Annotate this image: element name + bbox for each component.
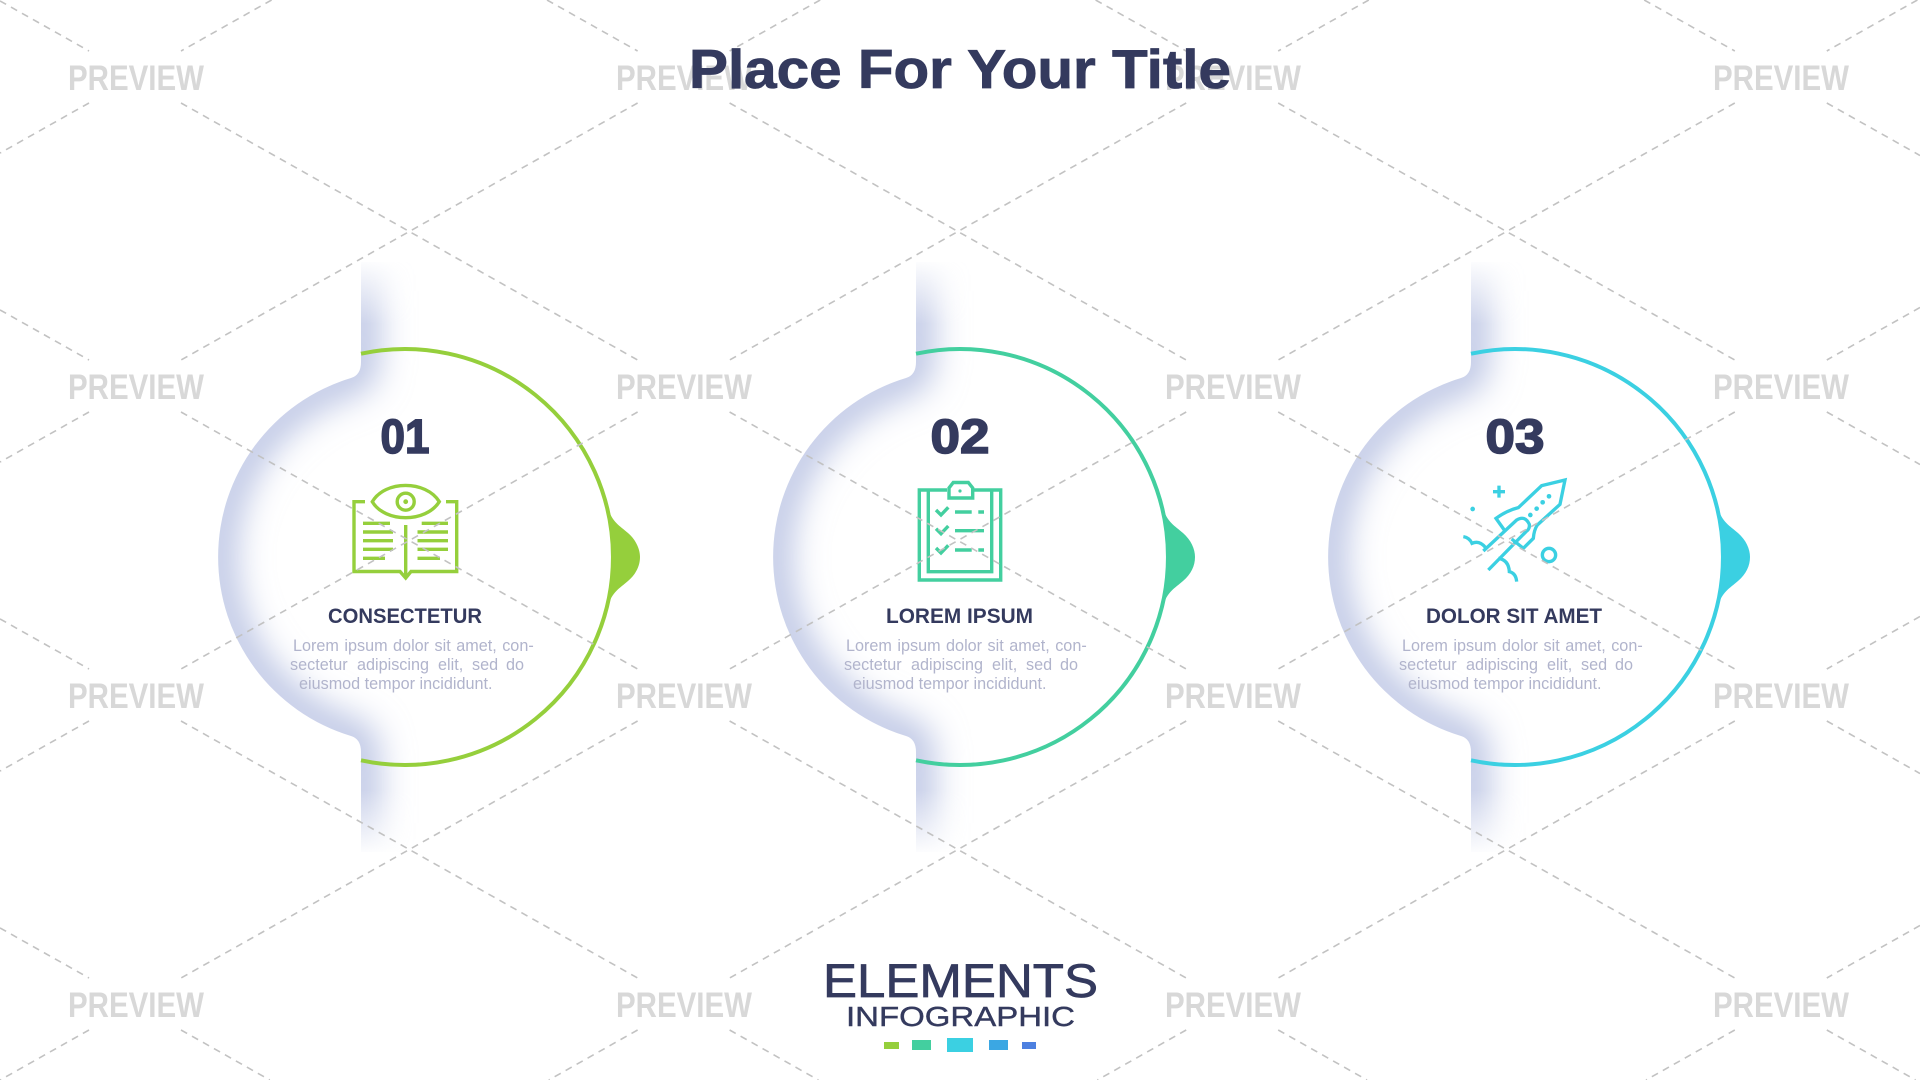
body text: elit, [438, 656, 463, 674]
body text: adipiscing [1466, 656, 1538, 674]
inset shadow cut-out [773, 240, 916, 875]
logo: elements infographic [823, 954, 1098, 1052]
body text: Lorem ipsum dolor sit amet, con- [293, 637, 534, 655]
inset shadow cut-out [218, 240, 361, 875]
watermark: preview labels: PREVIEW [1713, 59, 1849, 98]
panel: step 02 [773, 240, 1195, 875]
number 03: 03 [1486, 411, 1544, 464]
body text: adipiscing [357, 656, 429, 674]
body text: Lorem ipsum dolor sit amet, con- [1402, 637, 1643, 655]
icon: rocket [1463, 480, 1565, 582]
watermark: preview labels: PREVIEW [616, 986, 752, 1025]
watermark: preview labels: PREVIEW [1165, 677, 1301, 716]
watermark: preview labels: PREVIEW [68, 677, 204, 716]
body text: eiusmod tempor incididunt. [1408, 675, 1601, 693]
icon: open book with eye [354, 485, 457, 578]
body text: elit, [992, 656, 1017, 674]
watermark: preview labels: PREVIEW [1713, 368, 1849, 407]
body text: sed [472, 656, 498, 674]
body text: sed [1581, 656, 1607, 674]
number 01: 01 [380, 411, 430, 464]
cyan nub [1718, 508, 1750, 606]
title: Place For Your Title [689, 38, 1231, 100]
watermark: preview labels: PREVIEW [1165, 59, 1301, 98]
heading: LOREM IPSUM [886, 605, 1033, 628]
green nub [608, 508, 640, 606]
body text: sectetur [290, 656, 348, 674]
panel: step 03 [1328, 240, 1750, 875]
watermark: preview labels: PREVIEW [68, 368, 204, 407]
watermark: preview labels: PREVIEW [1713, 986, 1849, 1025]
number 02: 02 [930, 411, 990, 464]
body text: eiusmod tempor incididunt. [853, 675, 1046, 693]
watermark: preview labels: PREVIEW [1165, 986, 1301, 1025]
teal nub [1163, 508, 1195, 606]
watermark: preview labels: PREVIEW [1713, 677, 1849, 716]
body text: adipiscing [911, 656, 983, 674]
body text: sed [1026, 656, 1052, 674]
watermark: preview labels: PREVIEW [68, 59, 204, 98]
teal ring [916, 349, 1168, 765]
body text: sectetur [1399, 656, 1457, 674]
logo word: elements: ELEMENTS [823, 954, 1098, 1007]
colour bars [884, 1038, 1036, 1052]
green ring [361, 349, 613, 765]
body text: do [1615, 656, 1633, 674]
body text: do [1060, 656, 1078, 674]
body text: eiusmod tempor incididunt. [299, 675, 492, 693]
logo word: infographic: INFOGRAPHIC [846, 1001, 1075, 1032]
watermark: preview labels: PREVIEW [616, 677, 752, 716]
inset shadow cut-out [1328, 240, 1471, 875]
watermark: preview labels: PREVIEW [68, 986, 204, 1025]
watermark: preview labels: PREVIEW [1165, 368, 1301, 407]
body text: sectetur [844, 656, 902, 674]
cyan ring [1471, 349, 1723, 765]
panel: step 01 [218, 240, 640, 875]
icon: clipboard checklist [919, 482, 1001, 580]
body text: do [506, 656, 524, 674]
body text: elit, [1547, 656, 1572, 674]
watermark: preview labels: PREVIEW [616, 368, 752, 407]
body text: Lorem ipsum dolor sit amet, con- [846, 637, 1087, 655]
heading: CONSECTETUR [328, 605, 482, 628]
heading: DOLOR SIT AMET [1426, 605, 1602, 628]
watermark: preview labels: PREVIEW [616, 59, 752, 98]
